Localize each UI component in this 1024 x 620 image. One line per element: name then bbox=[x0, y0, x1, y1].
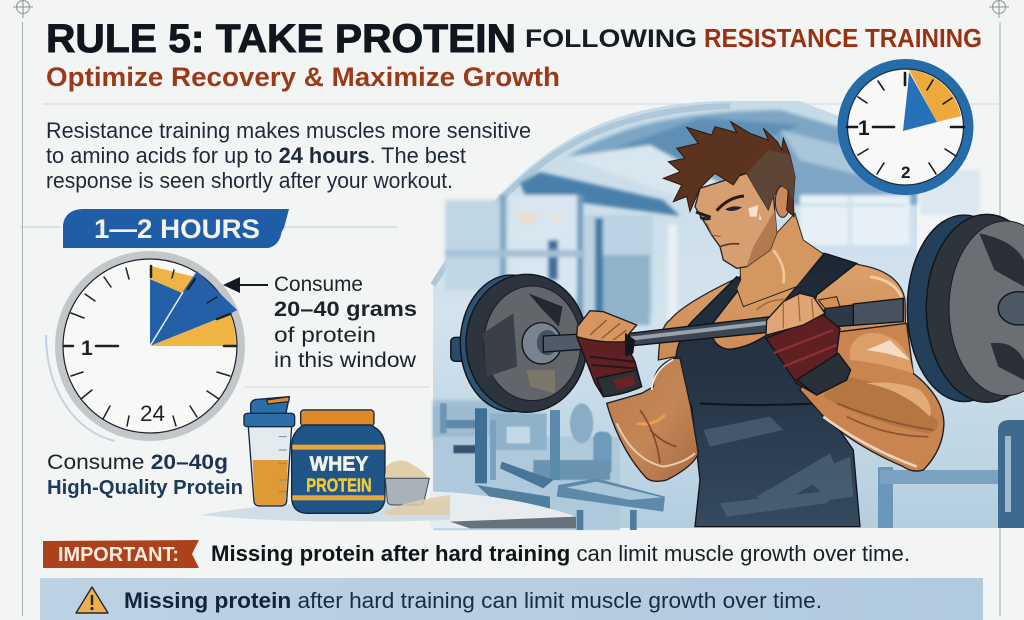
important tag bbox=[43, 540, 199, 568]
important message: Missing protein after hard training can limit muscle growth over time. bbox=[211, 541, 910, 566]
icon: protein products bbox=[200, 397, 450, 522]
blue sector bbox=[903, 72, 937, 131]
clock: 1–2 hour window bbox=[842, 64, 968, 190]
jar label protein: PROTEIN bbox=[306, 475, 372, 496]
face bbox=[695, 173, 777, 268]
callout: warning band bbox=[40, 578, 983, 620]
text: consume 20-40g high-quality protein: High-Quality Protein bbox=[47, 476, 243, 499]
hair bbox=[663, 122, 795, 217]
neck bbox=[737, 213, 823, 307]
title following: FOLLOWING bbox=[525, 25, 697, 53]
icon: powder bowl bbox=[383, 460, 450, 515]
icon: whey protein jar bbox=[292, 410, 385, 513]
clock label 1: 1 bbox=[81, 337, 93, 360]
gym floor equipment bbox=[430, 403, 665, 530]
title main: RULE 5: TAKE PROTEIN bbox=[46, 17, 516, 61]
face features bbox=[717, 196, 744, 211]
yellow sector bbox=[909, 70, 961, 122]
heading: title bbox=[46, 17, 982, 61]
chest and shoulders bbox=[658, 247, 907, 377]
ear bbox=[775, 186, 790, 217]
hands and wrist wraps bbox=[577, 293, 851, 397]
icon: registration mark left bbox=[13, 0, 33, 18]
warning message: Missing protein after hard training can limit muscle growth over time. bbox=[124, 588, 822, 613]
icon: warning triangle bbox=[76, 587, 108, 613]
text: consume 20-40g high-quality protein bbox=[47, 451, 243, 499]
illustration: athlete with barbell bbox=[451, 122, 1024, 527]
banner: 1–2 hours: 1—2 HOURS bbox=[94, 214, 260, 244]
barbell left plate bbox=[451, 274, 587, 412]
callout: consume text: 20–40 grams bbox=[274, 297, 417, 321]
gym background illustration bbox=[430, 101, 1024, 530]
yellow sector bottom bbox=[150, 314, 236, 346]
left hand wrap bbox=[577, 311, 642, 397]
subtitle: Optimize Recovery & Maximize Growth bbox=[46, 62, 560, 92]
callout: consume text bbox=[274, 273, 417, 372]
tank top bbox=[676, 253, 860, 527]
barbell right plate bbox=[907, 214, 1024, 402]
clock label 24: 24 bbox=[140, 401, 165, 426]
right hand wrap bbox=[766, 293, 851, 395]
right arm bbox=[800, 323, 944, 471]
left arm bbox=[607, 358, 698, 481]
head bbox=[663, 122, 823, 307]
clock label 1: 1 bbox=[858, 117, 870, 140]
clock: 24 hour window bbox=[46, 255, 241, 441]
gym right equipment bbox=[878, 420, 1024, 528]
banner: 1–2 hours bbox=[63, 209, 289, 248]
important tag: IMPORTANT: bbox=[58, 544, 179, 566]
barbell bar bbox=[543, 298, 903, 352]
intro text block: to amino acids for up to 24 hours. The best bbox=[46, 143, 466, 168]
intro text block bbox=[46, 118, 531, 193]
clock label 2: 2 bbox=[901, 163, 910, 182]
callout: consume text: of protein bbox=[274, 324, 376, 347]
icon: shaker bottle bbox=[244, 397, 295, 506]
intro text block: response is seen shortly after your workout. bbox=[46, 168, 453, 193]
blue sector bbox=[150, 271, 237, 346]
torso and arms bbox=[607, 247, 944, 527]
yellow sector top bbox=[151, 266, 195, 294]
title resistance training: RESISTANCE TRAINING bbox=[704, 25, 982, 53]
text: consume 20-40g high-quality protein: Consume 20–40g bbox=[47, 451, 228, 474]
clock ticks bbox=[64, 266, 236, 426]
icon: registration mark right bbox=[989, 0, 1009, 18]
arrow bbox=[223, 277, 268, 293]
intro text block: Resistance training makes muscles more sensitive bbox=[46, 118, 531, 143]
callout: consume text: Consume bbox=[274, 273, 363, 296]
jar label whey: WHEY bbox=[310, 454, 368, 476]
callout: consume text: in this window bbox=[274, 349, 417, 372]
callout: important bbox=[43, 540, 910, 568]
clock ticks bbox=[847, 73, 964, 174]
